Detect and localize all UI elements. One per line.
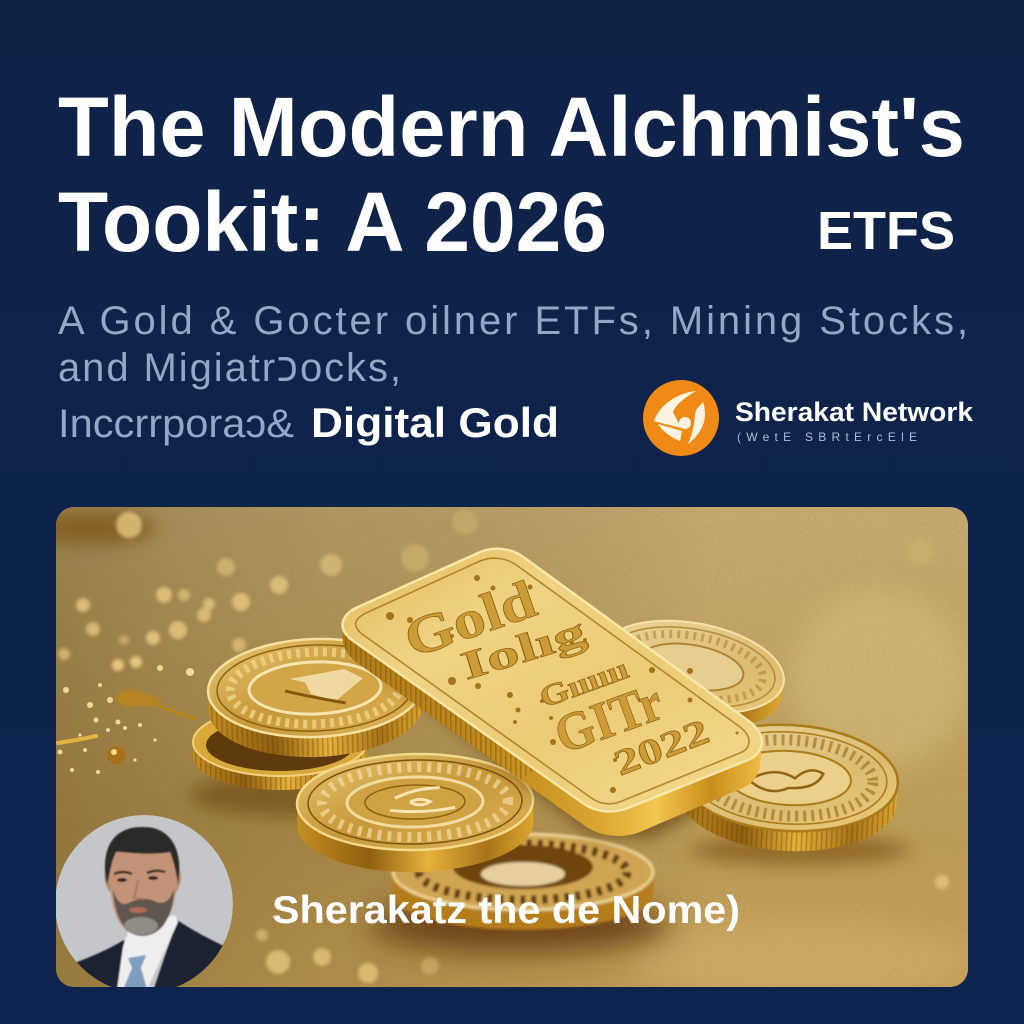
coin: lower left bbox=[192, 720, 367, 790]
fine gold dots bbox=[58, 665, 194, 774]
subtitle: Inccrrporaɔ& bbox=[58, 402, 294, 446]
coin: bottom centre bbox=[393, 834, 653, 930]
eyes bbox=[117, 876, 158, 882]
coin: front left bbox=[296, 752, 534, 874]
title: The Modern Alchmist's bbox=[58, 80, 965, 174]
bar engraving: 2022 bbox=[609, 711, 714, 783]
coin: upper left bbox=[206, 635, 424, 761]
logo: Sherakat Network bbox=[643, 380, 974, 456]
subtitle: and Migiatrכocks, bbox=[58, 346, 401, 390]
beard grey bbox=[124, 917, 158, 935]
title: Tookit: A 2026 bbox=[58, 175, 607, 269]
bar engraving: Gold bbox=[396, 569, 544, 669]
shadow under bar bbox=[375, 676, 700, 848]
bar engraving: Gıııııı bbox=[535, 652, 633, 715]
bar top face bbox=[343, 549, 762, 811]
subtitle: A Gold & Gocter oilner ETFs, Mining Stocks, bbox=[58, 299, 968, 343]
tie bbox=[123, 954, 148, 987]
face bbox=[110, 850, 177, 928]
bar engraving: GITr bbox=[547, 671, 670, 765]
bokeh highlights bbox=[58, 509, 949, 983]
subtitle bbox=[58, 299, 968, 446]
gold bar bbox=[343, 549, 762, 838]
logo wordmark: Sherakat Network bbox=[735, 397, 974, 427]
highlight: Digital Gold: Digital Gold bbox=[311, 399, 559, 446]
bar flecks bbox=[386, 575, 738, 793]
shirt bbox=[117, 915, 178, 990]
table surface bbox=[35, 507, 970, 1000]
caption: Sherakatz the de Nome) bbox=[272, 889, 740, 932]
title bbox=[58, 80, 965, 269]
mouth bbox=[129, 907, 147, 913]
coin: right bbox=[686, 723, 900, 852]
nose bbox=[134, 880, 144, 899]
bar engraving bbox=[408, 580, 710, 776]
brows bbox=[114, 871, 165, 874]
panel: gold photo bbox=[35, 507, 970, 1000]
bar side edge bbox=[343, 624, 761, 836]
hair bbox=[105, 827, 180, 884]
logo tagline: (WetE SBRtErcElE bbox=[737, 430, 917, 444]
suit bbox=[76, 920, 223, 987]
portrait backdrop bbox=[55, 815, 233, 993]
avatar: portrait bbox=[55, 815, 233, 1000]
bar side ribbing bbox=[345, 636, 532, 780]
coin: back right bbox=[622, 620, 785, 724]
icon: orange swirl bbox=[643, 380, 719, 456]
ears bbox=[105, 868, 181, 892]
bar engraving: Iolıg bbox=[455, 608, 591, 689]
bar inner rim bbox=[356, 558, 749, 804]
beard bbox=[113, 888, 174, 936]
gold droplets and threads bbox=[58, 690, 195, 764]
title fragment: ETFS: ETFS bbox=[817, 201, 955, 261]
